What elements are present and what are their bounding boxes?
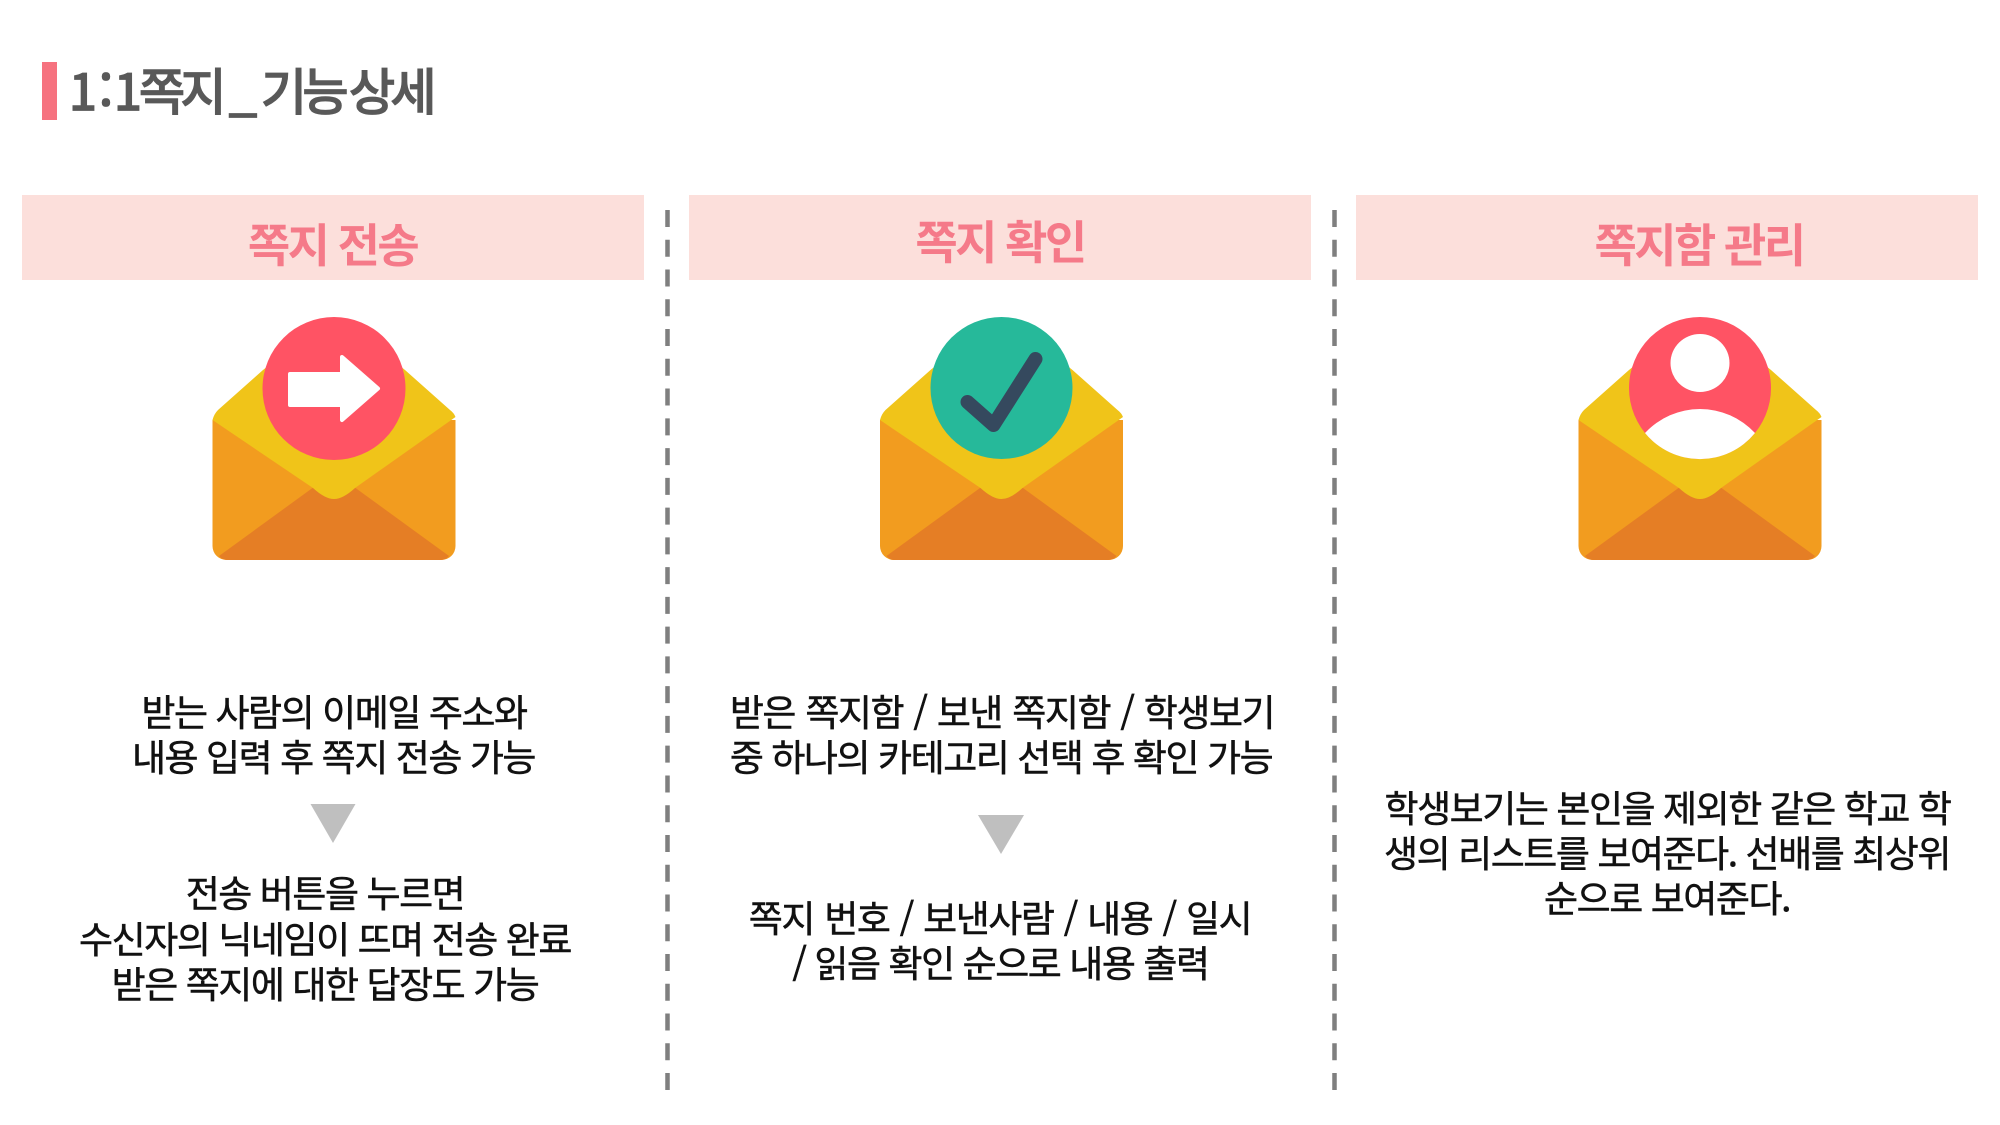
icon: envelope with person [1578,317,1822,560]
heading: 쪽지 확인: 쪽지 확인 [915,207,1085,273]
title: : [99,53,110,125]
text block: output: 쪽지 번호 / 보낸사람 / 내용 / 일시 [749,889,1251,943]
panel: 쪽지 전송 [22,195,644,1009]
text block: student view description: 순으로 보여준다. [1544,869,1790,923]
icon: envelope with check [880,317,1123,560]
text block: send result: 받은 쪽지에 대한 답장도 가능 [112,955,539,1009]
heading: 쪽지함 관리 [1356,195,1978,280]
heading: 쪽지 전송 [22,195,644,280]
panel: 쪽지 확인 [689,195,1311,988]
heading: 쪽지 전송: 쪽지 전송 [248,210,418,276]
text block: output: / 읽음 확인 순으로 내용 출력 [792,934,1209,988]
arrow: down triangle [310,804,356,843]
text block: send result: 전송 버튼을 누르면 [186,864,464,918]
text block: student view description: 학생보기는 본인을 제외한 같은 학교 학 [1384,779,1951,833]
text block: output [749,889,1251,988]
panel: 쪽지함 관리 [1356,195,1978,923]
text block: send result: 수신자의 닉네임이 뜨며 전송 완료 [79,910,571,964]
title: 1 [69,53,94,125]
title [42,53,432,125]
text block: student view description [1384,779,1951,923]
arrow: down triangle [978,815,1024,854]
title: 쪽지 [139,53,232,125]
text block: category selection: 받은 쪽지함 / 보낸 쪽지함 / 학생보기 [730,683,1274,737]
title: _ [229,53,262,125]
text block: category selection [730,683,1274,782]
title: 기능 [261,53,354,125]
text block: student view description: 생의 리스트를 보여준다. 선배를 최상위 [1384,824,1950,878]
text block: send result [79,864,571,1009]
title: 1 [114,53,139,125]
text block: input description [132,683,535,782]
heading: 쪽지함 관리: 쪽지함 관리 [1595,210,1803,276]
heading: 쪽지 확인 [689,195,1311,280]
text block: category selection: 중 하나의 카테고리 선택 후 확인 가능 [730,728,1273,782]
text block: input description: 내용 입력 후 쪽지 전송 가능 [132,728,535,782]
text block: input description: 받는 사람의 이메일 주소와 [141,683,527,737]
title: 상세 [349,53,432,125]
icon: envelope with arrow [212,317,456,560]
